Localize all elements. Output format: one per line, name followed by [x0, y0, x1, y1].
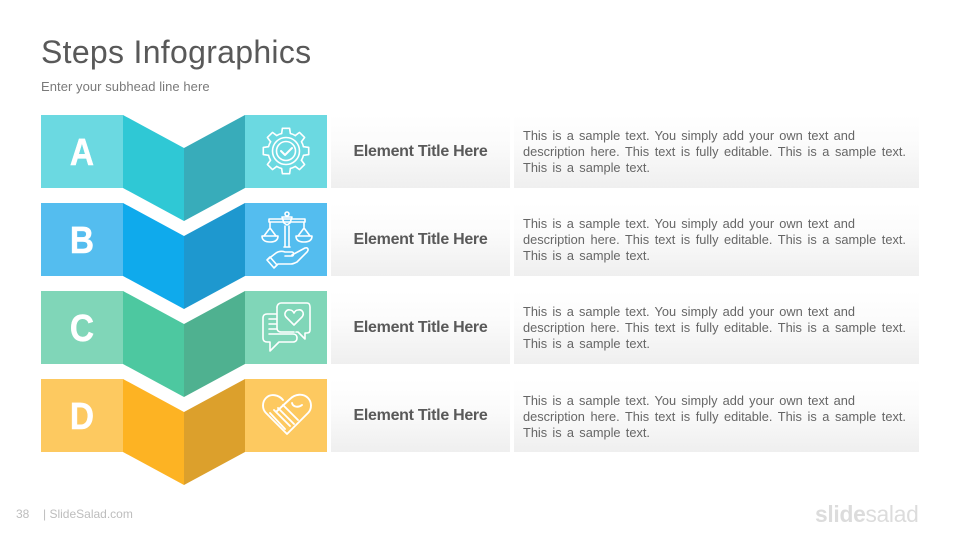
step C title panel: Element Title Here	[354, 319, 487, 336]
step C description: This is a sample text. You simply add your own text and	[523, 304, 855, 319]
step A description: description here. This text is fully editable. This is a sample text.	[523, 144, 906, 159]
step B icon box	[245, 203, 327, 276]
step A description	[514, 115, 919, 188]
step A icon box	[245, 115, 327, 188]
step A title panel	[331, 115, 510, 188]
icon: speech bubbles with heart	[262, 302, 311, 352]
step D description	[514, 379, 919, 452]
step A description: This is a sample text.	[523, 160, 650, 175]
step C description: description here. This text is fully editable. This is a sample text.	[523, 320, 906, 335]
subhead: Enter your subhead line here	[41, 79, 210, 94]
step C description	[514, 291, 919, 364]
step B left box	[41, 203, 123, 276]
step B description: description here. This text is fully editable. This is a sample text.	[523, 232, 906, 247]
icon: gear with check	[262, 128, 310, 174]
step A description: This is a sample text. You simply add your own text and	[523, 128, 855, 143]
step D title panel	[331, 379, 510, 452]
step C left box	[41, 291, 123, 364]
page number: 38	[16, 507, 29, 521]
step B description	[514, 203, 919, 276]
step D title panel: Element Title Here	[354, 407, 487, 424]
step B title panel: Element Title Here	[354, 231, 487, 248]
icon: scales on hand	[261, 211, 313, 269]
step C left box: C	[70, 308, 94, 350]
step D description: This is a sample text.	[523, 425, 650, 440]
step D description: description here. This text is fully editable. This is a sample text.	[523, 409, 906, 424]
step D left box: D	[70, 396, 94, 438]
step B description: This is a sample text.	[523, 248, 650, 263]
step C title panel	[331, 291, 510, 364]
step D left box	[41, 379, 123, 452]
title: Steps Infographics	[41, 34, 311, 70]
logo wordmark: slidesalad	[815, 501, 918, 527]
step B description: This is a sample text. You simply add your own text and	[523, 216, 855, 231]
step D description: This is a sample text. You simply add your own text and	[523, 393, 855, 408]
step C icon box	[245, 291, 327, 364]
step A left box	[41, 115, 123, 188]
icon: handshake heart	[262, 394, 312, 435]
step A left box: A	[70, 132, 94, 174]
step C description: This is a sample text.	[523, 336, 650, 351]
step B left box: B	[70, 220, 94, 262]
step D icon box	[245, 379, 327, 452]
step A title panel: Element Title Here	[354, 143, 487, 160]
step B title panel	[331, 203, 510, 276]
footer site name: | SlideSalad.com	[43, 507, 133, 521]
